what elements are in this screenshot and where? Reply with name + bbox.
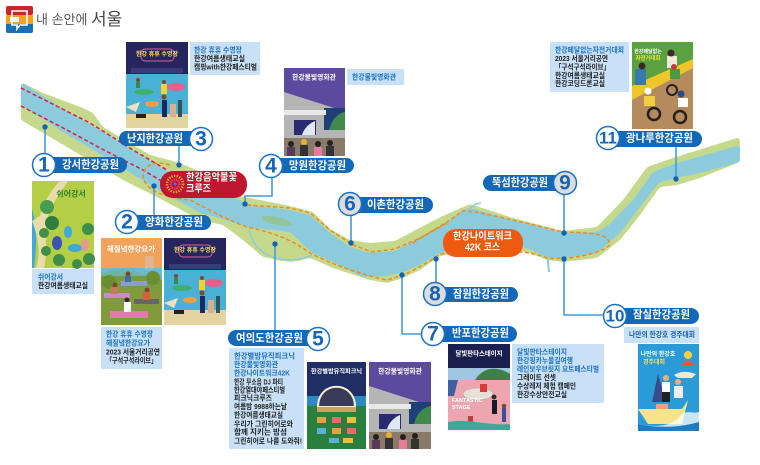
- text box 11: 광나루 programs: 「구석구석라이브」: [555, 62, 610, 72]
- callout: 한강나이트워크 42K 코스: 42K 코스: [465, 242, 500, 254]
- label 3: 난지한강공원: 난지한강공원: [127, 131, 183, 145]
- text box 7: 반포 programs: [512, 344, 604, 403]
- poster: 달빛판타스테이지: 달빛판타스테이지: [455, 348, 503, 358]
- river water: [21, 82, 740, 277]
- callout: 한강나이트워크 42K 코스: [443, 229, 523, 257]
- Yeouido island: [250, 228, 313, 261]
- label 3: 난지한강공원: [119, 128, 212, 150]
- text box 5: 여의도 programs: 한강 무소음 DJ 파티: [234, 376, 283, 386]
- text box 7: 반포 programs: 달빛판타스테이지: [517, 346, 567, 356]
- text box 7: 반포 programs: 레인보우브릿지 요트페스티벌: [517, 364, 599, 374]
- text box 2: 양화 programs: 「구석구석라이브」: [106, 355, 157, 365]
- Bamseom island: [261, 214, 293, 228]
- label 10: 잠실한강공원: 10: [606, 306, 624, 326]
- river banks: [21, 82, 740, 283]
- text box 5: 여의도 programs: [229, 348, 304, 449]
- label 7: 반포한강공원: 7: [427, 322, 439, 346]
- poster: 한강별밤뮤직피크닉: [307, 362, 366, 449]
- text box 5: 여의도 programs: 한강별밤뮤직피크닉: [234, 350, 295, 360]
- text box 3: 난지 programs: [190, 42, 260, 75]
- text box 3: 난지 programs: 캠핑with한강페스티벌: [194, 62, 257, 72]
- label 5: 여의도한강공원: 5: [312, 328, 324, 350]
- poster: 한강 휴휴 수영장 (난지): 한강 휴휴 수영장: [136, 50, 178, 58]
- label 8: 잠원한강공원: [424, 282, 518, 306]
- night walk 42K course, orange dashed: [143, 163, 610, 280]
- label 8: 잠원한강공원: 잠원한강공원: [453, 286, 509, 300]
- poster: 해질녘한강요가: 해질녘한강요가: [107, 244, 155, 254]
- poster: 나만의 한강호 경주대회: 경주대회: [643, 358, 665, 366]
- text box 5: 여의도 programs: 한강나이트워크42K: [234, 368, 290, 378]
- cruise route, red dashed: [21, 88, 167, 170]
- text box 11: 광나루 programs: 한강코딩드론교실: [555, 78, 605, 88]
- poster: 한강페달없는 자전거대회: 한강페달없는: [634, 48, 662, 55]
- label 4: 망원한강공원: [260, 154, 354, 178]
- text box 7: 반포 programs: 한강수상안전교실: [517, 389, 567, 399]
- callout: 한강음악불꽃 크루즈: 한강음악불꽃: [186, 170, 237, 184]
- label 1: 강서한강공원: [32, 154, 127, 176]
- label 11: 광나루한강공원: 11: [599, 128, 617, 148]
- text box 1: 강서 programs: 한강여름생태교실: [38, 280, 88, 290]
- label 4: 망원한강공원: 망원한강공원: [289, 158, 346, 172]
- text box 11: 광나루 programs: 한강페달없는자전거대회: [555, 44, 624, 54]
- label 9: 뚝섬한강공원: 뚝섬한강공원: [492, 175, 548, 189]
- poster: 달빛판타스테이지: FANTASTIC: [452, 398, 482, 404]
- text box 4: 망원 programs: 한강물빛영화관: [352, 72, 396, 82]
- tributaries: [470, 203, 481, 208]
- text box 10: 잠실 programs: 나만의 한강호 경주대회: [629, 329, 695, 339]
- text box 5: 여의도 programs: 한강여름생태교실: [234, 410, 283, 420]
- poster: 한강 휴휴 수영장 (양화): [164, 238, 226, 325]
- label 11: 광나루한강공원: 광나루한강공원: [626, 130, 693, 144]
- label 1: 강서한강공원: 강서한강공원: [62, 157, 119, 171]
- text box 5: 여의도 programs: 우리가 그린히어로와: [234, 418, 293, 428]
- poster: 해질녘한강요가: [101, 238, 162, 325]
- poster: 한강 휴휴 수영장 (난지): [126, 42, 188, 128]
- leader lines and location dots: [42, 124, 679, 334]
- text box 3: 난지 programs: 한강여름생태교실: [194, 53, 245, 63]
- label 2: 양화한강공원: 2: [121, 210, 133, 234]
- poster: 한강물빛영화관 (여의도): 한강물빛영화관: [378, 366, 423, 376]
- text box 5: 여의도 programs: 한강물빛영화관: [234, 359, 278, 369]
- poster: 한강페달없는 자전거대회: 자전거대회: [636, 54, 660, 62]
- text box 5: 여의도 programs: 피크닉크루즈: [234, 392, 272, 402]
- text box 4: 망원 programs: [347, 69, 404, 85]
- poster: 한강물빛영화관 (여의도): [369, 362, 431, 449]
- text box 7: 반포 programs: 수상레저 체험 캠페인: [517, 380, 576, 390]
- text box 5: 여의도 programs: 여름밤 9988하는날: [234, 401, 287, 411]
- poster: 쉬어강서: [32, 181, 95, 269]
- label 4: 망원한강공원: 4: [265, 154, 277, 178]
- callout: 한강음악불꽃 크루즈: [160, 170, 247, 198]
- logo: 내 손안에 서울: [6, 6, 122, 33]
- poster: 한강별밤뮤직피크닉: 한강별밤뮤직피크닉: [311, 368, 362, 376]
- text box 1: 강서 programs: [32, 269, 94, 294]
- label 5: 여의도한강공원: [228, 328, 330, 350]
- label 8: 잠원한강공원: 8: [429, 282, 441, 306]
- text box 7: 반포 programs: 한강핑카누물길여행: [517, 355, 573, 365]
- poster: 한강물빛영화관 (망원): 한강물빛영화관: [292, 72, 337, 82]
- label 2: 양화한강공원: 양화한강공원: [145, 214, 203, 228]
- label 9: 뚝섬한강공원: 9: [559, 172, 571, 194]
- text box 1: 강서 programs: 쉬어강서: [38, 272, 63, 282]
- text box 5: 여의도 programs: 한강열대야페스티벌: [234, 384, 285, 394]
- logo: 내 손안에 서울: 서울: [91, 10, 122, 29]
- callout: 한강나이트워크 42K 코스: 한강나이트워크: [453, 230, 512, 242]
- label 11: 광나루한강공원: [596, 126, 702, 150]
- logo: 내 손안에 서울: 내 손안에: [36, 12, 87, 27]
- label 6: 이촌한강공원: 이촌한강공원: [367, 197, 424, 211]
- poster: 쉬어강서: 쉬어강서: [56, 188, 86, 198]
- label 6: 이촌한강공원: 6: [344, 192, 356, 216]
- label 10: 잠실한강공원: [604, 304, 699, 328]
- label 10: 잠실한강공원: 잠실한강공원: [633, 307, 690, 321]
- text box 11: 광나루 programs: 한강여름생태교실: [555, 70, 605, 80]
- map: Han River: [21, 82, 740, 283]
- text box 2: 양화 programs: 2023 서울거리공연: [106, 346, 160, 356]
- poster: 한강물빛영화관 (망원): [284, 68, 345, 156]
- poster: 나만의 한강호 경주대회: [638, 344, 699, 431]
- text box 2: 양화 programs: 해질녘한강요가: [106, 338, 150, 348]
- label 5: 여의도한강공원: 여의도한강공원: [236, 330, 303, 344]
- callout: 한강음악불꽃 크루즈: 크루즈: [186, 183, 211, 195]
- text box 11: 광나루 programs: 2023 서울거리공연: [555, 53, 608, 63]
- poster: 달빛판타스테이지: [448, 344, 510, 430]
- label 7: 반포한강공원: [422, 322, 517, 346]
- poster: 달빛판타스테이지: STAGE: [452, 405, 471, 411]
- poster: 한강 휴휴 수영장 (양화): 한강 휴휴 수영장: [174, 246, 216, 254]
- text box 2: 양화 programs: [101, 327, 162, 369]
- label 6: 이촌한강공원: [338, 192, 433, 216]
- poster: 나만의 한강호 경주대회: 나만의 한강호: [641, 350, 676, 358]
- label 9: 뚝섬한강공원: [483, 172, 576, 194]
- label 7: 반포한강공원: 반포한강공원: [452, 326, 509, 340]
- label 3: 난지한강공원: 3: [195, 128, 207, 150]
- text box 7: 반포 programs: 그레이트 선셋: [517, 372, 556, 382]
- label 2: 양화한강공원: [116, 210, 211, 234]
- label 1: 강서한강공원: 1: [38, 154, 50, 176]
- text box 10: 잠실 programs: [624, 327, 699, 343]
- text box 5: 여의도 programs: 함께 지키는 밤섬: [234, 426, 287, 436]
- poster: 한강페달없는 자전거대회: [632, 42, 693, 129]
- text box 11: 광나루 programs: [550, 42, 629, 92]
- text box 5: 여의도 programs: 그린히어로 나를 도와줘!: [234, 436, 302, 446]
- text box 3: 난지 programs: 한강 휴휴 수영장: [194, 44, 242, 54]
- text box 2: 양화 programs: 한강 휴휴 수영장: [106, 328, 153, 338]
